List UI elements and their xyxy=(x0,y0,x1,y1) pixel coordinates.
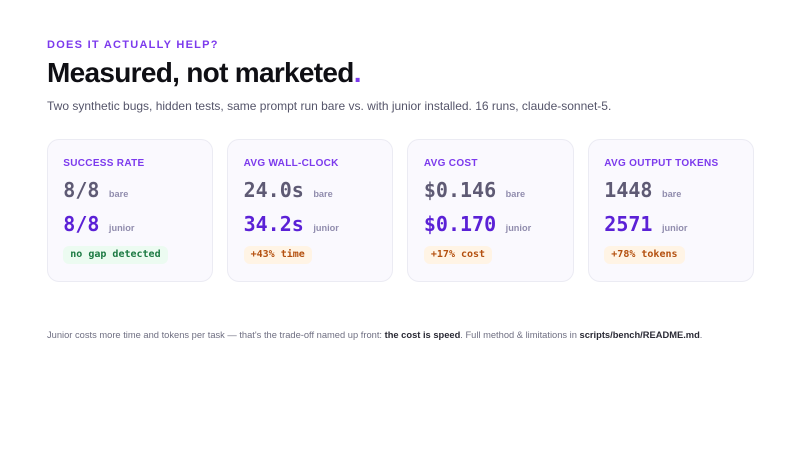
panel: average output tokens xyxy=(588,139,754,282)
panel: average wall-clock xyxy=(227,139,393,282)
badge: token increase xyxy=(604,246,685,264)
card label: output tokens: AVG OUTPUT TOKENS xyxy=(604,158,718,169)
metric: junior success rate: 8/8 junior xyxy=(63,212,134,236)
panel: average cost xyxy=(407,139,574,282)
badge: time increase xyxy=(244,246,312,264)
card label: success rate: SUCCESS RATE xyxy=(63,158,144,169)
subtitle: Two synthetic bugs, hidden tests, same prompt run bare vs. with junior installed. 16 runs, claude-sonnet-5. xyxy=(47,99,611,113)
metric: bare tokens: 1448 bare xyxy=(604,178,681,202)
card label: wall-clock: AVG WALL-CLOCK xyxy=(244,158,339,169)
metric: junior cost: $0.170 junior xyxy=(424,212,531,236)
eyebrow heading: DOES IT ACTUALLY HELP? xyxy=(47,39,219,51)
badge: cost increase: +17% cost xyxy=(431,249,485,260)
metric: bare cost: $0.146 bare xyxy=(424,178,525,202)
title: Measured, not marketed. xyxy=(47,57,361,88)
metric: junior wall-clock: 34.2s junior xyxy=(244,212,339,236)
metric: bare success rate: 8/8 bare xyxy=(63,178,128,202)
footnote: Junior costs more time and tokens per task — that's the trade-off named up front: the cost is speed. Full method & limitations in scripts/bench/README.md. xyxy=(47,330,702,340)
badge: token increase: +78% tokens xyxy=(611,249,678,260)
panel: success rate xyxy=(47,139,213,282)
metric: junior tokens: 2571 junior xyxy=(604,212,687,236)
badge: time increase: +43% time xyxy=(251,249,305,260)
badge: cost increase xyxy=(424,246,492,264)
badge: no gap detected: no gap detected xyxy=(70,249,161,260)
metric: bare wall-clock: 24.0s bare xyxy=(244,178,333,202)
badge: no gap detected xyxy=(63,246,168,264)
card label: cost: AVG COST xyxy=(424,158,478,169)
